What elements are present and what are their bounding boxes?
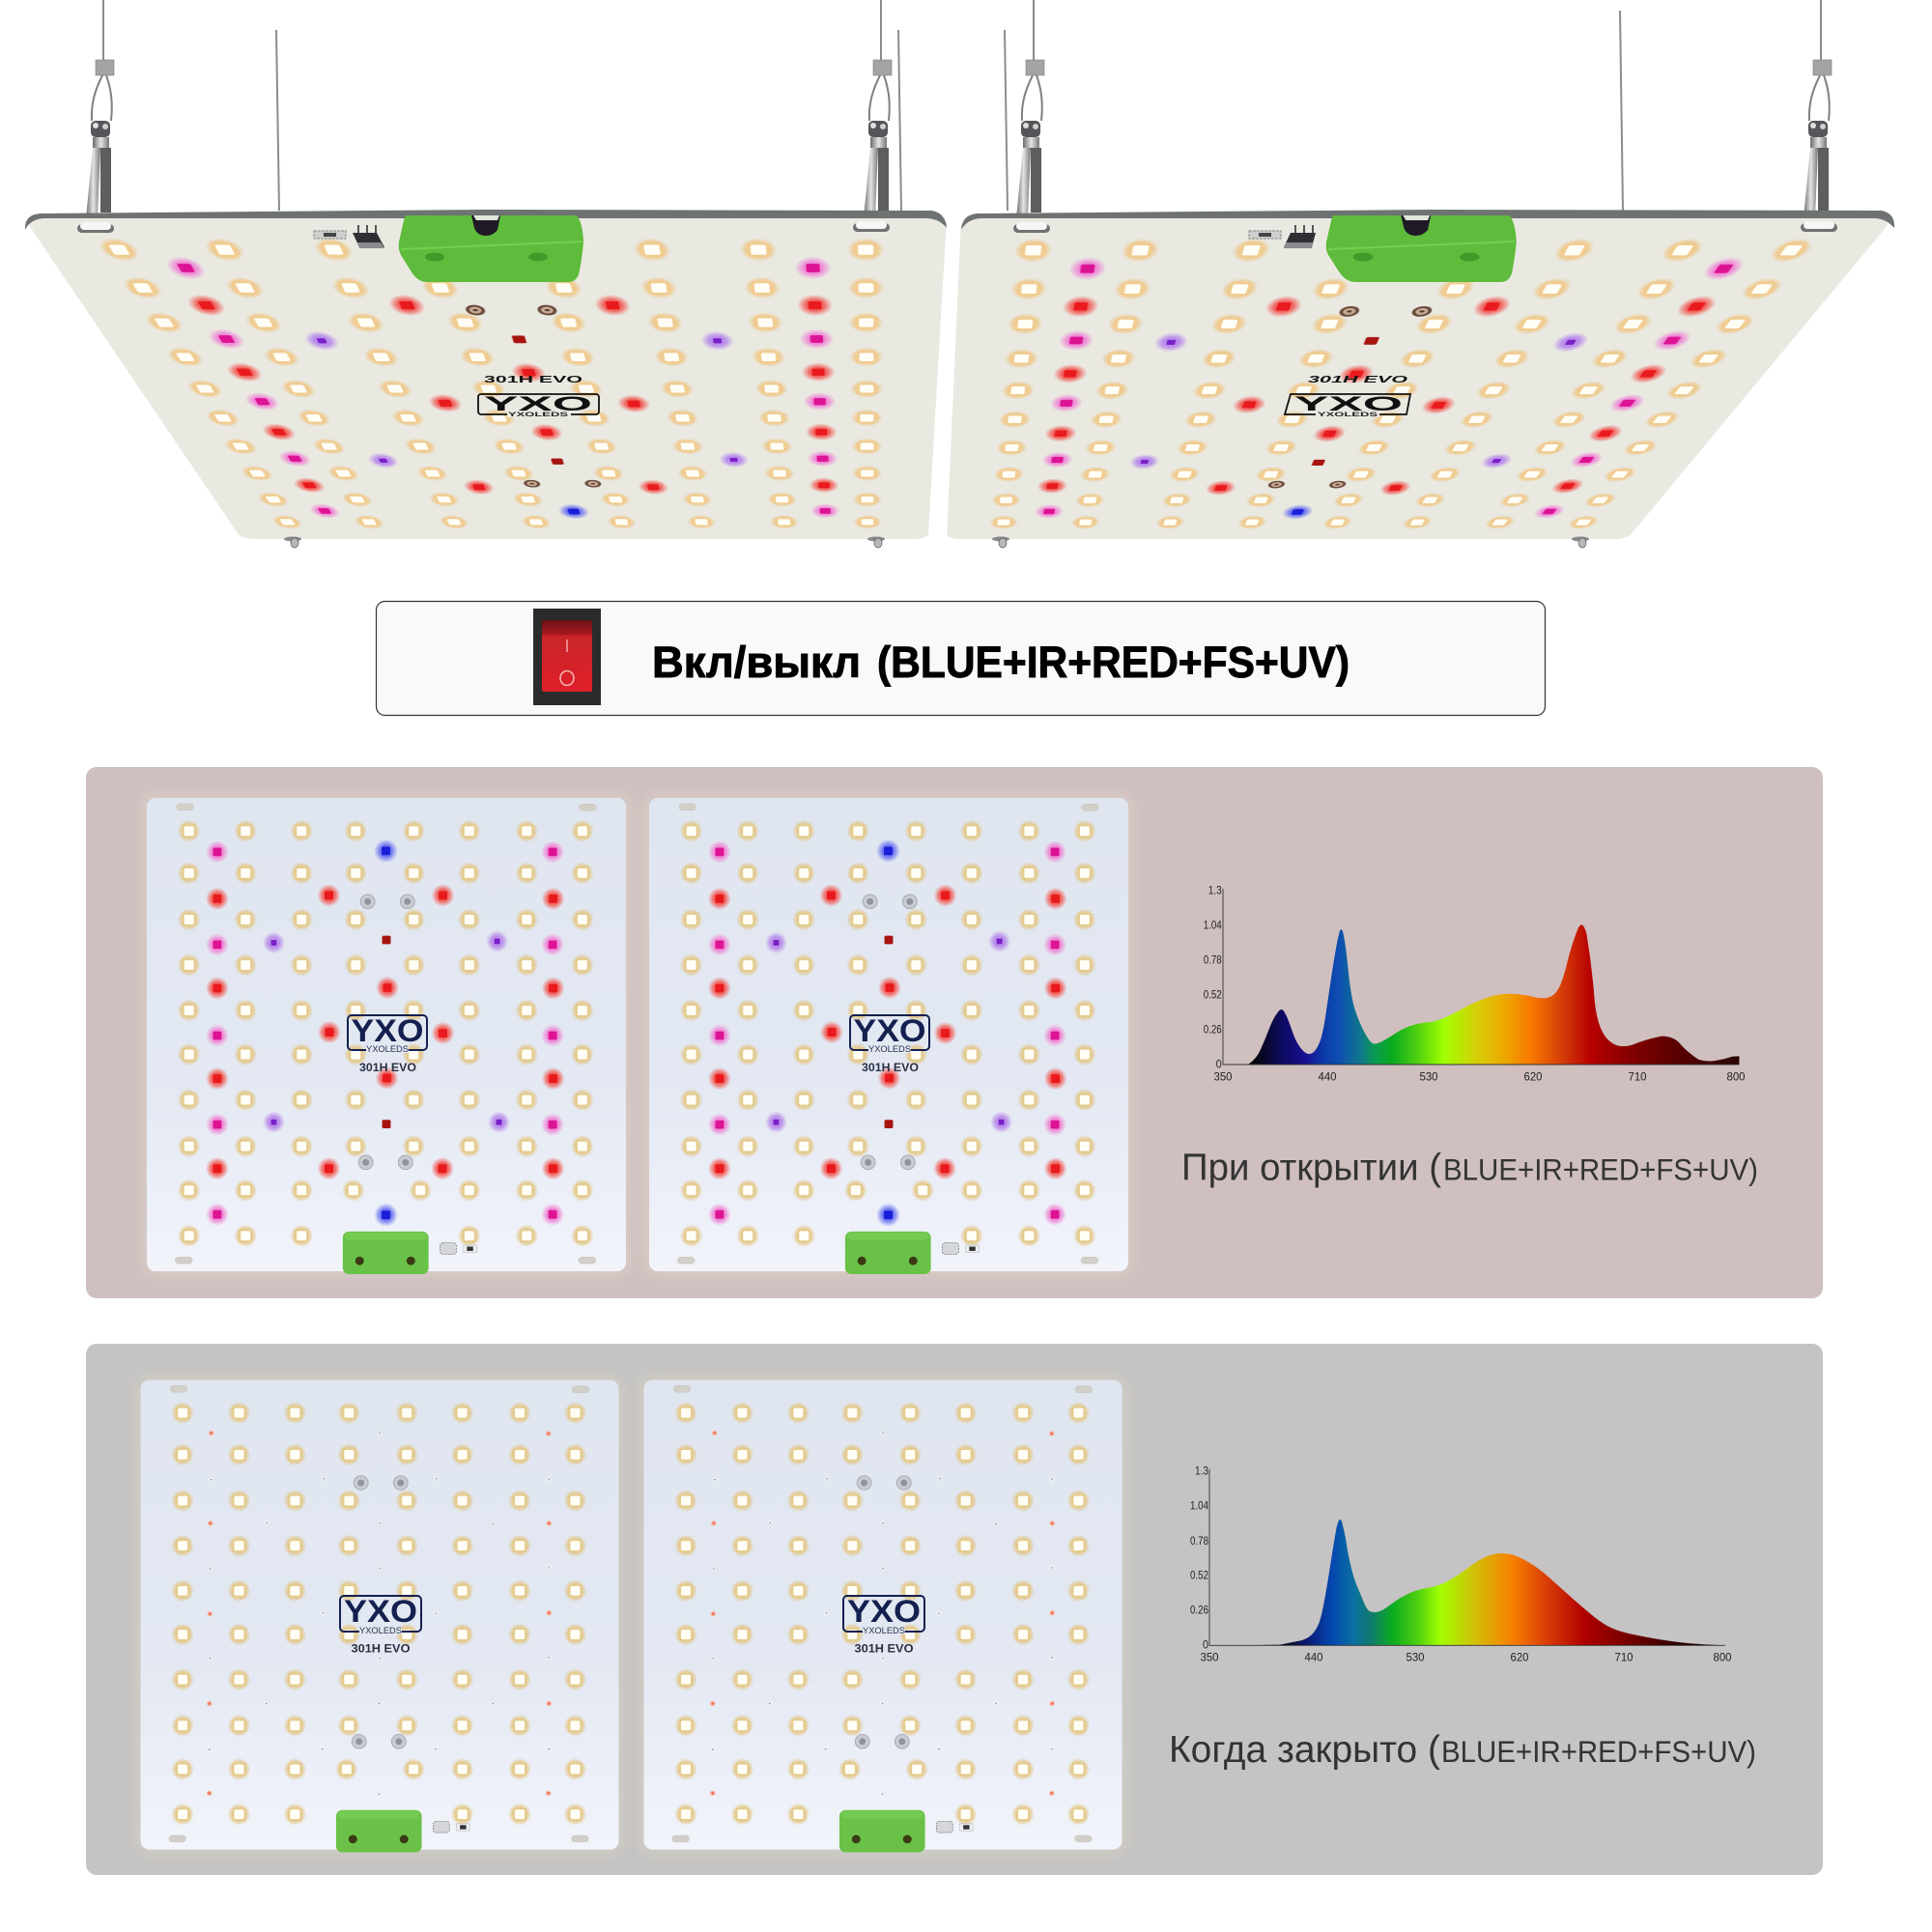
caption: open mode: BLUE+IR+RED+FS+UV) (1443, 1152, 1758, 1187)
switch label: (BLUE+IR+RED+FS+UV) (877, 638, 1350, 687)
chart: open mode spectrum: 620 (1524, 1071, 1542, 1083)
panel: left angled grow light board (29, 218, 947, 539)
right light model label and logo: 301H EVO (1308, 374, 1407, 385)
logo: closed mode right: YXOLEDS (863, 1626, 905, 1635)
left light grey top edge (25, 210, 947, 230)
chart: closed mode spectrum (1190, 1466, 1731, 1663)
caption: closed mode (1169, 1729, 1756, 1771)
chart: closed mode spectrum: 0.52 (1190, 1571, 1208, 1582)
left light model label and logo: YXOLEDS (508, 412, 568, 418)
chart: closed mode spectrum: 710 (1615, 1652, 1633, 1663)
logo: open mode left: YXO (352, 1013, 423, 1048)
right light model label and logo (1285, 374, 1410, 418)
caption: closed mode: Когда закрыто ( (1169, 1729, 1440, 1771)
chart: closed mode spectrum: 0.78 (1190, 1536, 1208, 1548)
board: open mode left (141, 792, 632, 1277)
chart: closed mode spectrum: 350 (1200, 1652, 1219, 1663)
logo: open mode right: 301H EVO (862, 1062, 919, 1074)
chart: open mode spectrum: 1.04 (1204, 920, 1222, 931)
panel: right angled grow light board (947, 218, 1888, 539)
logo: open mode right: YXO (854, 1013, 925, 1048)
logo: open mode left (348, 1013, 427, 1074)
switch label (652, 638, 1350, 687)
logo: closed mode right: 301H EVO (854, 1642, 914, 1656)
right light model label and logo: YXO (1294, 393, 1403, 415)
chart: open mode spectrum (1204, 886, 1745, 1083)
right light chips (1249, 225, 1316, 248)
left light model label and logo (478, 374, 599, 418)
mounting slots and screws (77, 221, 1837, 548)
chart: open mode spectrum: 350 (1213, 1071, 1233, 1083)
chart: closed mode spectrum: 800 (1714, 1652, 1731, 1663)
board: closed mode right (639, 1375, 1127, 1855)
chart: closed mode spectrum: 0.26 (1190, 1605, 1208, 1617)
right light model label and logo: YXOLEDS (1318, 412, 1378, 418)
right light grey top edge (961, 210, 1894, 230)
chart: open mode spectrum: 0.78 (1204, 955, 1222, 967)
chart: open mode spectrum: 800 (1727, 1071, 1745, 1083)
logo: closed mode right: YXO (847, 1594, 921, 1629)
board: closed mode left (135, 1375, 624, 1855)
panel: lights closed mode (86, 1344, 1823, 1875)
panel: on/off switch bar (377, 601, 1546, 715)
chart: open mode spectrum: 440 (1318, 1071, 1337, 1083)
panel: lights open mode (86, 767, 1823, 1298)
left light chips (314, 225, 384, 248)
chart: open mode spectrum: 1.3 (1208, 886, 1222, 897)
chart: open mode spectrum: 0.52 (1204, 990, 1222, 1002)
logo: open mode left: YXOLEDS (366, 1044, 409, 1054)
board: open mode right (643, 792, 1134, 1277)
icon: left green driver box (399, 215, 583, 282)
logo: open mode left: 301H EVO (359, 1062, 416, 1074)
icon: right green driver box (1326, 215, 1517, 282)
logo: closed mode left: YXOLEDS (359, 1626, 402, 1635)
chart: closed mode spectrum: 1.3 (1195, 1466, 1208, 1478)
logo: open mode right: YXOLEDS (868, 1044, 911, 1054)
caption: open mode (1181, 1148, 1758, 1189)
logo: closed mode left: YXO (344, 1594, 417, 1629)
left light model label and logo: YXO (484, 393, 592, 415)
chart: closed mode spectrum: 530 (1406, 1652, 1424, 1663)
chart: open mode spectrum: 710 (1629, 1071, 1646, 1083)
hanging hardware and wires (86, 0, 1832, 218)
chart: closed mode spectrum: 620 (1511, 1652, 1528, 1663)
chart: open mode spectrum: 530 (1420, 1071, 1437, 1083)
switch label: Вкл/выкл (652, 638, 861, 687)
chart: closed mode spectrum: 0 (1203, 1640, 1208, 1652)
logo: closed mode right (843, 1594, 924, 1656)
logo: closed mode left (340, 1594, 421, 1656)
caption: open mode: При открытии ( (1181, 1148, 1441, 1189)
chart: closed mode spectrum: 1.04 (1190, 1501, 1209, 1513)
icon: red rocker switch (533, 609, 601, 705)
chart: closed mode spectrum: 440 (1304, 1652, 1323, 1663)
left light model label and logo: 301H EVO (484, 374, 582, 385)
chart: open mode spectrum: 0.26 (1204, 1025, 1222, 1037)
chart: open mode spectrum: 0 (1216, 1060, 1222, 1071)
logo: open mode right (850, 1013, 929, 1074)
logo: closed mode left: 301H EVO (352, 1642, 410, 1656)
caption: closed mode: BLUE+IR+RED+FS+UV) (1441, 1734, 1756, 1769)
